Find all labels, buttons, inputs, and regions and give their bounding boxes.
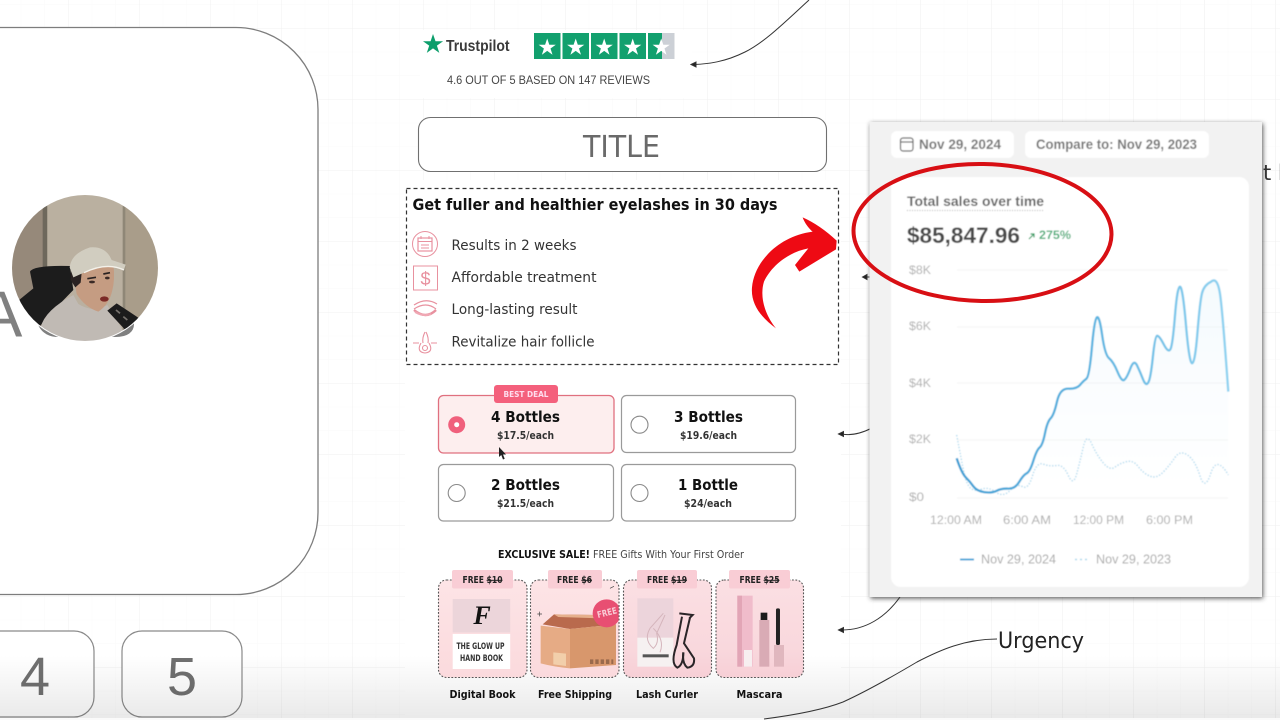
option: 4 bottles: BEST DEAL [504, 390, 548, 399]
panel: benefits: Affordable treatment [452, 270, 597, 286]
option: 1 bottle [622, 464, 796, 521]
panel: bundle options [438, 385, 796, 521]
panel: sales dashboard [870, 122, 1262, 597]
option: 4 bottles: 4 Bottles [491, 408, 560, 426]
bottom page shading [0, 655, 1280, 720]
icon: price tag [414, 266, 438, 290]
icon: price tag: $ [420, 269, 431, 289]
gift: lash curler [624, 570, 712, 701]
line chart: $0 [909, 490, 924, 504]
option: 2 bottles [438, 464, 614, 521]
chart legend: Nov 29, 2024 [981, 552, 1056, 566]
chart legend: Nov 29, 2023 [1096, 552, 1171, 566]
line chart: 6:00 PM [1146, 513, 1193, 527]
chart card [891, 177, 1249, 587]
gift: digital book: FREE $10 [462, 575, 503, 586]
gift: mascara [716, 570, 804, 701]
line chart: $2K [909, 432, 931, 446]
trustpilot rating [423, 33, 674, 87]
panel: benefits [406, 188, 838, 364]
compare filter pill: Compare to: Nov 29, 2023 [1036, 136, 1197, 152]
option: 1 bottle: 1 Bottle [678, 476, 738, 494]
gift: digital book: F [472, 601, 491, 630]
date filter pill [891, 131, 1014, 158]
arrow: red pointer [752, 217, 837, 328]
red highlight ellipse [852, 162, 1113, 303]
line chart: $8K [909, 263, 931, 277]
option: 2 bottles: $21.5/each [497, 497, 554, 510]
step box 5: 5 [167, 647, 197, 707]
chart legend [960, 552, 1171, 566]
option: 3 bottles [622, 396, 796, 452]
option: 1 bottle: $24/each [684, 497, 732, 510]
arrow: to trustpilot [691, 0, 809, 67]
option: 4 bottles: $17.5/each [497, 429, 554, 442]
icon: eye with lashes [414, 301, 437, 315]
icon: hair follicle [413, 332, 437, 353]
gift: lash curler: Lash Curler [636, 688, 699, 701]
sales total: Total sales over time [907, 193, 1044, 209]
free gifts heading [498, 548, 744, 561]
gift: mascara: FREE $25 [740, 575, 780, 586]
panel: benefits: Long-lasting result [452, 302, 578, 318]
line chart [909, 263, 1228, 527]
gift: digital book: THE GLOW UP [456, 642, 504, 652]
title box: TITLE [582, 130, 660, 165]
line chart: $4K [909, 376, 931, 390]
title box [418, 118, 826, 172]
line chart: 6:00 AM [1003, 513, 1051, 527]
date filter pill: Nov 29, 2024 [919, 136, 1001, 152]
compare filter pill [1025, 131, 1209, 158]
arrow: to benefits [862, 274, 872, 280]
benefits heading: Get fuller and healthier eyelashes in 30 days [412, 195, 778, 214]
step box 4 [0, 631, 94, 717]
sales total: 275% [1039, 230, 1071, 242]
trustpilot rating: 4.6 OUT OF 5 BASED ON 147 REVIEWS [447, 73, 650, 87]
icon: mouse cursor [499, 447, 506, 460]
step box 4: 4 [20, 647, 50, 707]
free gifts heading: FREE Gifts With Your First Order [593, 548, 744, 561]
trustpilot rating: Trustpilot [446, 38, 510, 55]
gift: digital book: HAND BOOK [460, 654, 503, 664]
option: 2 bottles: 2 Bottles [491, 476, 560, 494]
urgency label with connector [764, 629, 1084, 719]
sales total: $85,847.96 [907, 223, 1020, 248]
icon: calendar [412, 232, 438, 256]
step box 5 [122, 631, 242, 717]
gift: mascara: Mascara [736, 688, 782, 701]
option: 3 bottles: 3 Bottles [674, 408, 743, 426]
arrow: to bundle options [838, 428, 872, 436]
panel: benefits: Results in 2 weeks [452, 238, 576, 254]
line chart: 12:00 PM [1073, 513, 1124, 527]
line chart: 12:00 AM [930, 513, 982, 527]
line chart: $6K [909, 319, 931, 333]
gift: digital book [438, 570, 527, 701]
presenter photo [10, 193, 160, 343]
gift: digital book: Digital Book [450, 688, 516, 701]
urgency label with connector: Urgency [998, 629, 1084, 654]
option: 4 bottles [438, 385, 614, 453]
gift: free shipping: FREE $6 [557, 575, 592, 586]
gift: free shipping: Free Shipping [538, 688, 612, 701]
gift: lash curler: FREE $19 [647, 575, 687, 586]
gift: free shipping: FREE [596, 606, 618, 621]
panel: benefits: Revitalize hair follicle [452, 334, 595, 350]
free gifts heading: EXCLUSIVE SALE! [498, 548, 590, 561]
gift: free shipping [530, 570, 621, 701]
sales total [907, 193, 1071, 248]
option: 3 bottles: $19.6/each [680, 429, 737, 442]
arrow: to free gifts [838, 597, 900, 632]
panel: tags placeholder [0, 28, 318, 594]
